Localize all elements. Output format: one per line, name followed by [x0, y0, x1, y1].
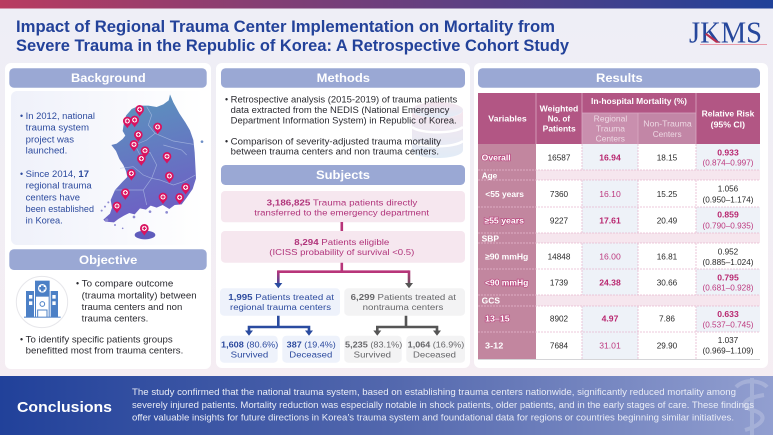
text: methods bullets: Retrospective analysis (2015-2019) of trauma patients [231, 95, 458, 105]
row: GCS 3-12 [485, 336, 754, 356]
row: SBP under 90: (0.681–0.928) [703, 284, 754, 293]
table header: Regional [594, 114, 627, 124]
box: all trauma patients [221, 191, 465, 222]
box: eligible patients: (ICISS probability of survival <0.5) [269, 247, 414, 257]
row: under 55 years [485, 185, 754, 204]
text: background bullets: In 2012, national [26, 111, 95, 121]
text: conclusions paragraph: severely injured patients. Mortality reduction was especially notable in shock patients, older patients, and in the early stages of care. These findings [132, 400, 754, 410]
table header: Relative Risk [702, 109, 755, 119]
box: nontrauma deceased: 1,064 (16.9%) [408, 340, 464, 350]
heading: Subjects: Subjects [316, 168, 370, 182]
panel: middle column [216, 63, 470, 368]
row: 55 years and over: ≥55 years [484, 216, 524, 226]
map pins [113, 105, 190, 236]
row: GCS 13-15 [485, 309, 754, 329]
row: SBP 90 and over: 0.952 [718, 247, 739, 256]
row: GCS 13-15: 7.86 [659, 315, 675, 324]
row: under 55 years: 16.10 [599, 189, 621, 199]
text: conclusions paragraph: offer valuable insights for future directions in Korea’s trauma system and foundational data for regions or countries beginning similar initiatives. [132, 412, 734, 422]
row: 55 years and over: 17.61 [599, 216, 621, 226]
row: Overall: 16.94 [599, 153, 621, 163]
table body fills [478, 144, 760, 360]
row: 55 years and over: 20.49 [657, 217, 678, 226]
row: GCS: GCS [482, 295, 500, 305]
row: Overall: 16587 [548, 154, 571, 163]
table header: Variables [488, 114, 527, 124]
box: nontrauma centers: 6,299 Patients treated at [351, 292, 457, 302]
table header: In-hospital Mortality (%) [591, 96, 687, 106]
text: objective bullets [20, 279, 197, 356]
table header: No. of [548, 114, 570, 124]
table header: Centers [596, 134, 625, 144]
box: nontrauma deceased [406, 336, 465, 363]
row: Overall: 0.933 [717, 147, 739, 157]
row: SBP under 90: 30.66 [657, 279, 678, 288]
table header: Non-Trauma [643, 119, 692, 129]
background inner card [11, 91, 205, 245]
text: methods bullets: Department Information System) in Republic of Korea. [231, 115, 457, 125]
box: all trauma patients: transferred to the emergency department [254, 208, 430, 218]
text: objective bullets: To identify specific patients groups [26, 334, 173, 344]
text: methods bullets: • [225, 136, 228, 146]
row: GCS 3-12: 7684 [550, 341, 569, 350]
text: background bullets: Since 2014, 17 [26, 169, 89, 179]
text: background bullets: project was [26, 134, 75, 144]
text: objective bullets: trauma centers. [82, 314, 148, 324]
heading: Conclusions: Conclusions [17, 399, 112, 416]
row: Age: Age [482, 170, 498, 180]
row: SBP: SBP [482, 233, 499, 243]
row: under 55 years: 1.056 [718, 185, 739, 194]
text: background bullets: • [20, 169, 23, 179]
panel: left column [5, 63, 211, 369]
row: Overall: Overall [482, 153, 511, 163]
text: background bullets: trauma system [26, 123, 89, 133]
text: objective bullets: • [20, 334, 23, 344]
table header: Patients [543, 124, 576, 134]
box: regional survived: Survived [231, 350, 269, 360]
row: SBP under 90 [485, 272, 754, 293]
heading: Methods [221, 68, 465, 88]
text: background bullets: • [20, 111, 23, 121]
text: conclusions paragraph [132, 387, 754, 422]
row: under 55 years: 15.25 [657, 190, 678, 199]
table header [478, 93, 760, 144]
row: Overall: 18.15 [657, 154, 678, 163]
table header: Centers [653, 129, 682, 139]
text: background bullets: been established [26, 204, 94, 214]
logo: JKMS: JKMS [689, 15, 762, 50]
text: objective bullets: To compare outcome [82, 279, 173, 289]
text: background bullets: regional trauma [26, 181, 92, 191]
row: SBP under 90: 1739 [550, 279, 569, 288]
box: regional trauma centers: 1,995 Patients treated at [228, 292, 335, 302]
row: SBP 90 and over: 16.81 [657, 252, 678, 262]
heading: Subjects [221, 165, 465, 185]
row: SBP under 90: 0.795 [717, 272, 739, 282]
box: eligible patients [221, 231, 465, 263]
heading: Objective: Objective [79, 253, 137, 267]
row: 55 years and over: (0.790–0.935) [703, 221, 754, 230]
arrow: connector to eligible [340, 222, 343, 231]
text: objective bullets: benefitted most from trauma centers. [26, 346, 183, 356]
title [16, 17, 570, 55]
row: SBP 90 and over: ≥90 mmHg [485, 252, 528, 262]
box: nontrauma centers: nontrauma centers [363, 302, 443, 312]
text: background bullets [20, 111, 95, 225]
box: regional survived: 1,608 (80.6%) [221, 340, 278, 350]
text: methods bullets: • [225, 95, 228, 105]
row: GCS 13-15: 0.633 [717, 309, 739, 319]
table header: (95% CI) [711, 119, 745, 129]
text: conclusions paragraph: The study confirmed that the national trauma system, based on establishing trauma centers nationwide, significantly reduced mortality among [132, 387, 736, 397]
row: under 55 years: 7360 [550, 190, 569, 199]
heading: Methods: Methods [317, 71, 370, 85]
text: objective bullets: trauma centers and non [82, 302, 182, 312]
box: regional deceased [282, 336, 340, 363]
box: eligible patients: 8,294 Patients eligible [294, 237, 390, 247]
row: SBP under 90: <90 mmHg [485, 278, 528, 288]
row: under 55 years: (0.950–1.174) [703, 195, 754, 204]
box: regional deceased: 387 (19.4%) [287, 340, 336, 350]
title: Impact of Regional Trauma Center Implementation on Mortality from [16, 17, 555, 36]
box: nontrauma deceased: Deceased [413, 350, 456, 360]
row: SBP 90 and over: 14848 [548, 252, 571, 262]
box: nontrauma survived [344, 336, 402, 363]
box: regional survived [220, 336, 278, 363]
text: methods bullets [225, 95, 458, 157]
icon: hospital with patient [16, 276, 68, 328]
row: GCS 3-12: 1.037 [718, 336, 739, 345]
arrow: nontrauma outcomes [373, 316, 441, 336]
heading: Background: Background [71, 71, 146, 85]
row: SBP 90 and over: (0.885–1.024) [703, 258, 754, 267]
text: methods bullets: data extracted from the NEDIS (National Emergency [231, 105, 450, 115]
heading: Objective [9, 249, 207, 270]
row: Overall: (0.874–0.997) [703, 159, 754, 168]
arrow: split to regional and nontrauma [274, 263, 413, 288]
arrow: regional outcomes [245, 316, 313, 336]
row: Overall [482, 147, 754, 168]
box: regional deceased: Deceased [289, 350, 333, 360]
table header: Trauma [596, 124, 625, 134]
row: SBP 90 and over: 16.00 [599, 252, 621, 262]
box: nontrauma survived: 5,235 (83.1%) [345, 340, 402, 350]
results table [478, 93, 760, 360]
icon: caduceus watermark [736, 378, 767, 435]
text: background bullets: centers have [26, 192, 80, 202]
row: 55 years and over: 0.859 [717, 210, 739, 220]
text: background bullets: launched. [26, 146, 67, 156]
row: GCS 13-15: (0.537–0.745) [703, 320, 754, 329]
text: methods bullets: Comparison of severity-adjusted trauma mortality [231, 136, 442, 146]
heading: Results [478, 68, 760, 88]
box: nontrauma survived: Survived [354, 350, 391, 360]
top colour bar [0, 0, 773, 8]
row: GCS 13-15: 4.97 [602, 314, 619, 324]
row: under 55 years: <55 years [485, 189, 524, 199]
heading: Results: Results [596, 71, 643, 85]
row: GCS 3-12: 29.90 [657, 341, 678, 350]
row: GCS 3-12: 31.01 [599, 340, 621, 350]
text: objective bullets: (trauma mortality) between [82, 290, 197, 300]
text: objective bullets: • [76, 279, 79, 289]
icon: database watermark [412, 102, 463, 158]
row: 55 years and over [484, 210, 754, 230]
table header: Weighted [540, 104, 578, 114]
text: background bullets: in Korea. [26, 215, 63, 225]
panel: conclusions [0, 376, 773, 435]
text: methods bullets: between trauma centers and non trauma centers. [231, 147, 439, 157]
row: SBP 90 and over [485, 247, 754, 267]
row: GCS 3-12: 3-12 [485, 340, 504, 350]
row: 55 years and over: 9227 [550, 217, 569, 226]
map of South Korea with trauma centers [101, 94, 203, 239]
panel: results [474, 63, 768, 368]
row: GCS 13-15: 13–15 [485, 314, 510, 324]
box: nontrauma centers [344, 288, 465, 316]
box: all trauma patients: 3,186,825 Trauma patients directly [267, 198, 418, 208]
heading: Background [9, 68, 207, 88]
box: regional trauma centers: regional trauma centers [230, 302, 331, 312]
row: GCS 3-12: (0.969–1.109) [703, 347, 754, 356]
row: SBP under 90: 24.38 [599, 278, 621, 288]
row: GCS 13-15: 8902 [550, 315, 569, 324]
box: regional trauma centers [220, 288, 340, 316]
title: Severe Trauma in the Republic of Korea: A Retrospective Cohort Study [16, 36, 570, 55]
